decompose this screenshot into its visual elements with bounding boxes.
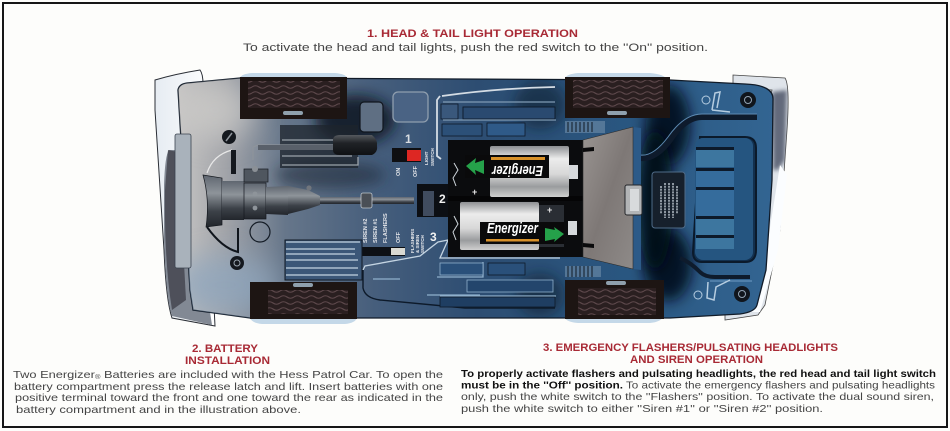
drive shaft [320,193,414,208]
heading: battery installation: 2. BATTERY [192,343,258,355]
flasher and siren switch: FLASHERS [410,229,415,253]
small square panel [360,102,383,132]
flasher and siren switch: 3 [430,230,437,244]
rear axle differential [203,166,320,227]
tire: front top [240,73,347,119]
warning plate [652,172,685,228]
tire: rear top [565,73,670,118]
front bottom vents [285,240,362,280]
heading: emergency flashers and siren: AND SIREN OPERATION [630,354,763,366]
text: battery installation instructions: Batteries are included with the Hess Patrol Car. To open the [100,370,443,381]
text: emergency flashers instructions: To properly activate flashers and pulsating headlights, the red head and tail light switch [461,369,936,380]
rear grille [693,137,756,262]
square panel [393,92,428,122]
light switch: SWITCH [430,148,435,166]
light switch: 1 [405,132,412,146]
flasher and siren switch: SWITCH [420,235,425,253]
text: emergency flashers instructions [461,369,936,415]
text: emergency flashers instructions: push the white switch to either ''Siren #1'' or ''Siren #2'' position. [461,404,823,415]
battery door [583,127,642,270]
exhaust pipe [253,135,377,160]
text: battery installation instructions: battery compartment press the release latch and lift. Insert batteries with one [14,382,443,393]
battery ribbed strips [565,121,605,277]
light switch: LIGHT [424,151,429,165]
text: battery installation instructions: Two Energizer [13,370,79,381]
flasher and siren switch: FLASHERS [383,213,389,243]
battery top: Energizer [491,162,543,179]
front top vents [280,125,358,168]
rear frame rails [640,114,757,281]
light switch: ON [396,168,402,176]
upper centre panels [437,87,556,159]
text: battery installation instructions [13,370,443,416]
heading: emergency flashers and siren: 3. EMERGENCY FLASHERS/PULSATING HEADLIGHTS [543,342,838,354]
battery top: + [472,187,477,197]
suspension arcs [207,150,270,252]
screw bottom left [230,256,244,270]
battery bottom: Energizer [487,220,539,237]
battery compartment [448,140,588,257]
tire: front bottom [250,282,357,324]
rear latch hooks [694,92,730,300]
battery top [465,146,578,197]
screw top left [222,130,236,144]
illustration: car underside [155,70,788,326]
car body [178,78,773,318]
rear bumper [725,75,788,320]
body shading [170,80,692,317]
lower centre panels [363,240,560,308]
flasher and siren switch [358,213,437,256]
light switch: OFF [413,165,419,177]
flasher and siren switch: OFF [396,231,402,243]
flasher and siren switch: SIREN #1 [373,219,379,243]
flasher and siren switch: SIREN #2 [363,219,369,243]
tire: rear bottom [565,280,664,323]
text: battery installation instructions: battery compartment and in the illustration above. [16,405,301,416]
switch 2 box [417,184,452,217]
heading: battery installation [185,343,270,367]
flasher and siren switch: & SIREN [415,235,420,253]
battery bottom: + [547,205,552,215]
text: emergency flashers instructions: must be in the ''Off'' position. To activate the emergency flashers and pulsating headlights [461,380,935,392]
front bumper [155,70,215,326]
screw rear bottom [734,286,750,302]
heading: battery installation: INSTALLATION [185,355,270,367]
screw rear top [740,92,756,108]
battery bottom [460,202,577,250]
front wing bar [175,134,191,268]
text: battery installation instructions: positive terminal toward the front and one toward the rear as indicated in the [15,393,443,404]
text: emergency flashers instructions: only, push the white switch to the ''Flashers'' position. To activate the dual sound siren, [461,392,934,403]
heading: head and tail light operation: 1. HEAD & TAIL LIGHT OPERATION [367,28,578,40]
text: battery installation instructions: ® [95,374,101,381]
heading: emergency flashers and siren [543,342,838,366]
text: head and tail light instruction: To activate the head and tail lights, push the red switch to the ''On'' position. [243,42,708,54]
light switch [392,132,435,177]
switch 2 box: 2 [439,192,446,206]
contact springs [453,163,458,240]
